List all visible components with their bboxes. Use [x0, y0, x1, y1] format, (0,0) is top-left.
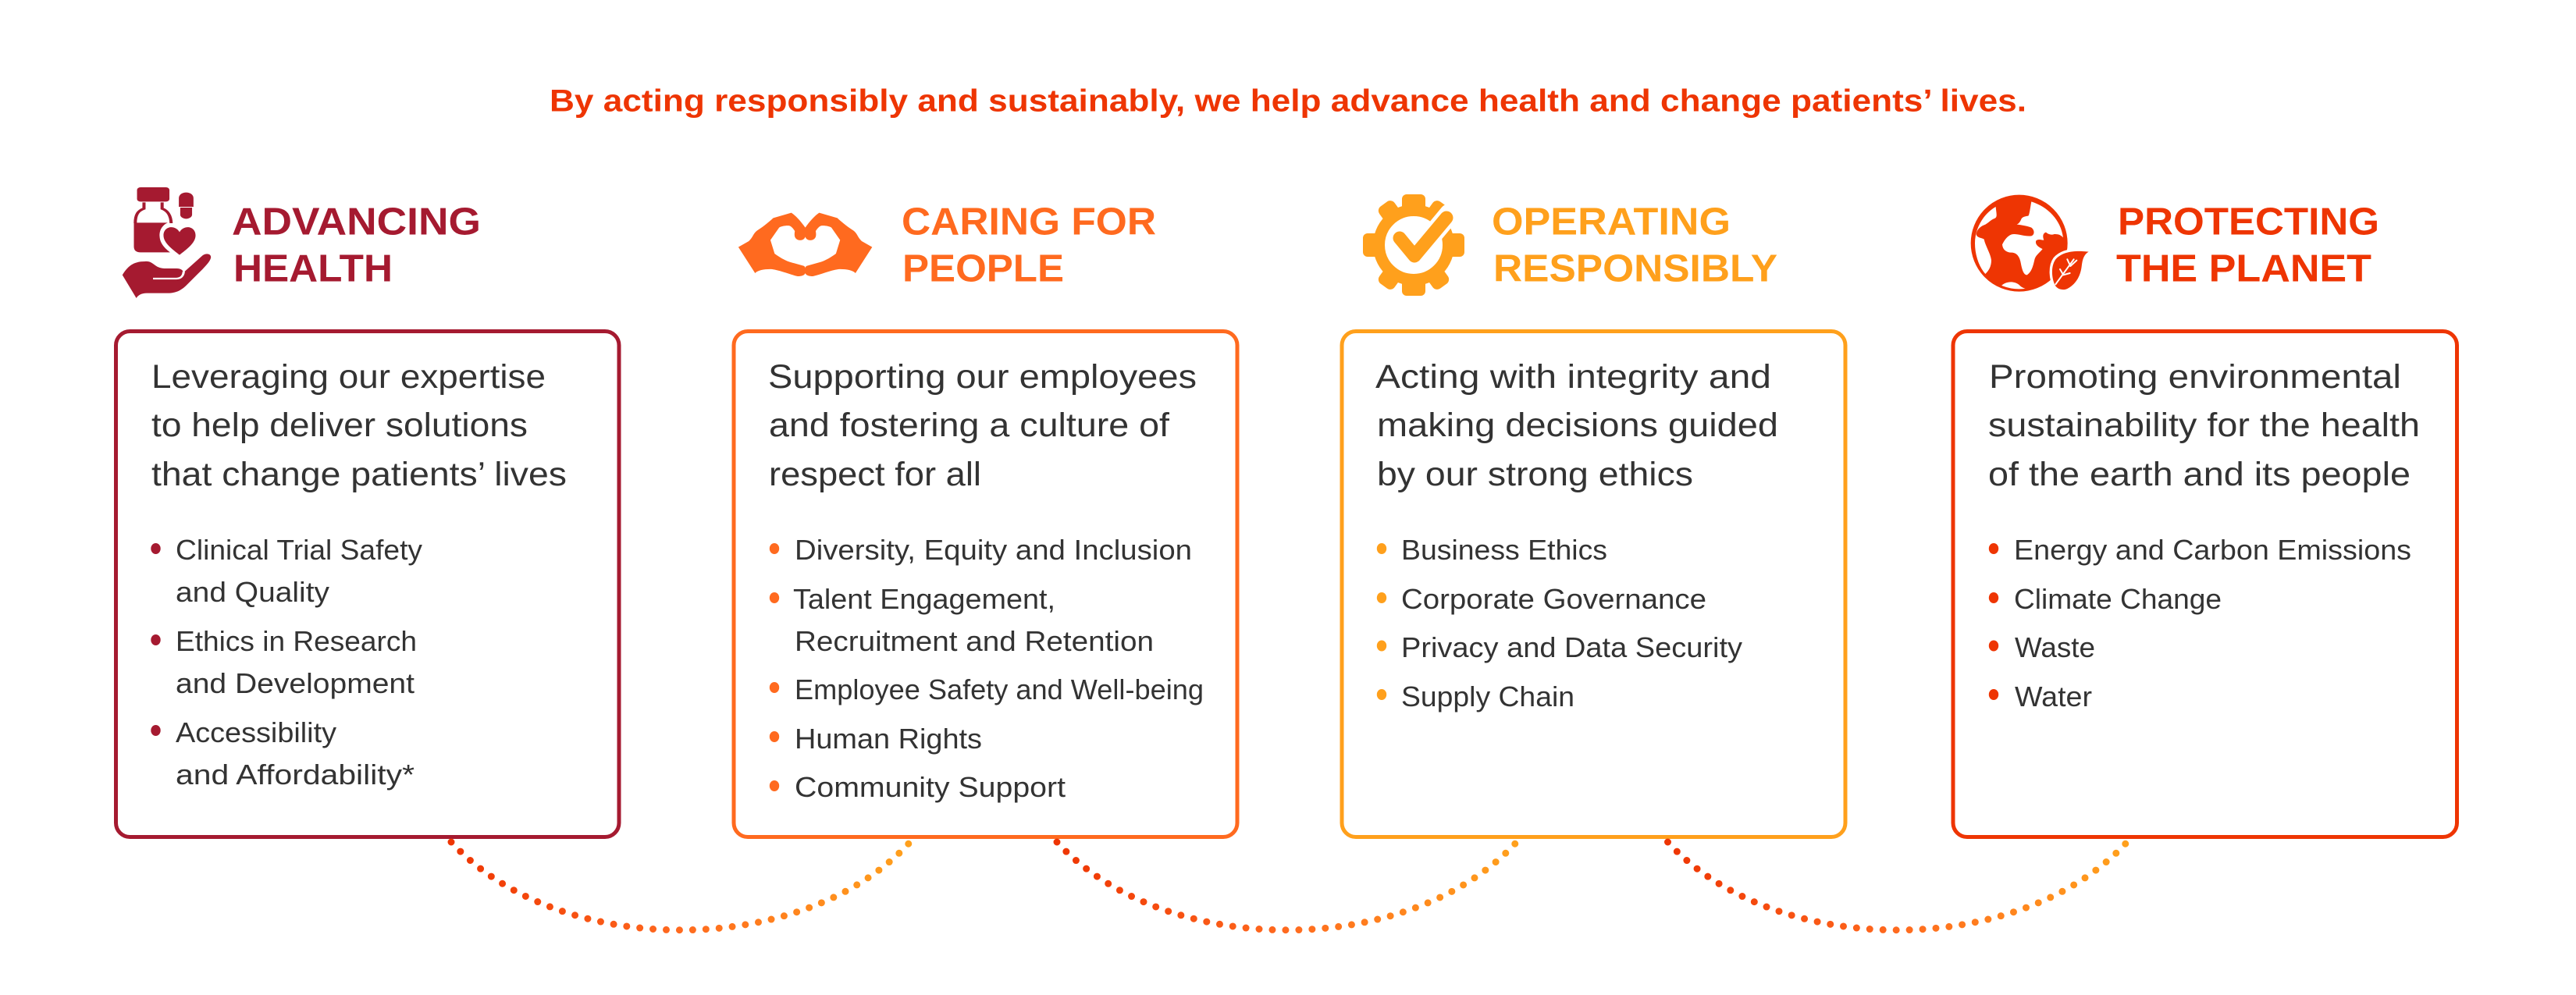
intro text: making decisions guided [1377, 407, 1778, 444]
item: Employee Safety and Well-being [795, 673, 1204, 705]
item: Recruitment and Retention [795, 625, 1154, 657]
item: Business Ethics [1401, 534, 1607, 566]
item: and Development [176, 667, 415, 699]
item: Energy and Carbon Emissions [2014, 534, 2411, 566]
heading: HEALTH [233, 248, 393, 290]
item: Ethics in Research [176, 625, 417, 657]
heading: PROTECTING [2118, 201, 2379, 243]
item: Supply Chain [1401, 681, 1574, 712]
heading: ADVANCING [232, 201, 481, 243]
item: and Quality [176, 576, 329, 608]
title: By acting responsibly and sustainably, we help advance health and change patients’ lives. [550, 84, 2026, 119]
intro text: Promoting environmental [1989, 358, 2401, 396]
item [151, 534, 422, 608]
item: Talent Engagement, [793, 583, 1055, 615]
bullet list [151, 534, 422, 791]
item: Climate Change [2014, 583, 2222, 615]
card [116, 331, 619, 837]
card [734, 331, 1237, 837]
item: Diversity, Equity and Inclusion [795, 534, 1192, 566]
intro text: by our strong ethics [1377, 456, 1693, 493]
item: Clinical Trial Safety [176, 534, 422, 566]
bullet list [1989, 534, 2411, 712]
heading [2116, 201, 2379, 290]
item: Accessibility [176, 716, 336, 748]
icon: gear with check mark [1363, 194, 1464, 296]
intro text: and fostering a culture of [769, 407, 1170, 444]
intro text [151, 358, 567, 493]
arrow: dotted arc from advancing health to caring for people [451, 842, 909, 930]
heading: OPERATING [1492, 201, 1731, 243]
item: Corporate Governance [1401, 583, 1706, 615]
intro text: Acting with integrity and [1375, 358, 1771, 396]
item: Privacy and Data Security [1401, 631, 1742, 663]
panel: caring for people [734, 201, 1237, 837]
intro text: that change patients’ lives [151, 456, 567, 493]
item: Waste [2015, 631, 2095, 663]
heading [232, 201, 481, 290]
icon: medicine bottle, heart and hand [123, 187, 211, 298]
bullet list [1377, 534, 1742, 712]
intro text: sustainability for the health [1988, 407, 2420, 444]
card [1342, 331, 1845, 837]
intro text: respect for all [769, 456, 981, 493]
intro text [1988, 358, 2420, 493]
arrow: dotted arc from caring for people to operating responsibly [1057, 842, 1515, 930]
heading: CARING FOR [902, 201, 1156, 243]
intro text [768, 358, 1197, 493]
bullet list [770, 534, 1204, 803]
item [151, 625, 417, 699]
heading: RESPONSIBLY [1493, 248, 1777, 290]
item: Water [2015, 681, 2092, 712]
heading [1492, 201, 1777, 290]
heading: THE PLANET [2116, 248, 2371, 290]
panel: advancing health [116, 187, 619, 837]
item: Community Support [795, 771, 1066, 803]
arrow: dotted arc from operating responsibly to protecting the planet [1667, 842, 2126, 930]
icon: heart hands [738, 213, 872, 276]
item: and Affordability* [176, 759, 415, 791]
item: Human Rights [795, 723, 982, 755]
intro text: to help deliver solutions [151, 407, 528, 444]
heading [902, 201, 1156, 290]
item [770, 583, 1154, 657]
heading: PEOPLE [902, 248, 1064, 290]
icon: globe with leaf [1972, 196, 2089, 291]
intro text: Leveraging our expertise [151, 358, 546, 396]
panel: protecting the planet [1953, 196, 2457, 837]
card [1953, 331, 2457, 837]
panel: operating responsibly [1342, 194, 1845, 837]
intro text: Supporting our employees [768, 358, 1197, 396]
item [151, 716, 415, 791]
intro text [1375, 358, 1778, 493]
intro text: of the earth and its people [1988, 456, 2411, 493]
